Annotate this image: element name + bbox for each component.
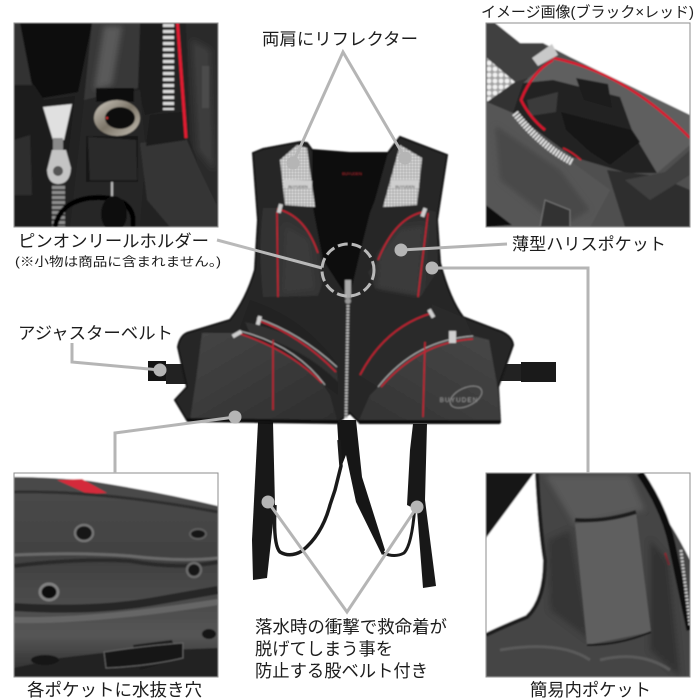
label: image note: イメージ画像(ブラック×レッド) xyxy=(481,3,694,21)
label: accessories note: (※小物は商品に含まれません。) xyxy=(15,255,221,269)
callout: shoulder reflectors lines xyxy=(286,52,412,170)
right shoulder reflector: BUYUDEN xyxy=(395,184,415,189)
label: pin-on reel holder: ピンオンリールホルダー xyxy=(18,232,209,251)
label: crotch belt description: 落水時の衝撃で救命着が xyxy=(255,617,447,637)
callout: drainage holes leader xyxy=(115,410,242,473)
photo panel: pin-on reel holder close-up xyxy=(14,23,218,232)
label: crotch belt description: 防止する股ベルト付き xyxy=(255,661,428,681)
callout: inner pocket leader xyxy=(426,262,588,473)
left shoulder reflector xyxy=(280,145,315,207)
lower right pockets xyxy=(359,304,500,420)
label: simple inner pocket: 簡易内ポケット xyxy=(530,680,651,700)
label: shoulder reflectors: 両肩にリフレクター xyxy=(262,30,418,49)
label: crotch belt description: 脱げてしまう事を xyxy=(255,639,393,659)
red piping and zip lines xyxy=(238,209,473,417)
vest xyxy=(175,137,513,422)
callout: hari pocket leader xyxy=(394,244,507,256)
crotch straps xyxy=(252,420,436,588)
label: adjuster belt: アジャスターベルト xyxy=(18,324,173,343)
label: crotch belt description xyxy=(255,617,447,681)
callout: reel holder leader and dashed circle xyxy=(217,240,374,296)
lower left pockets xyxy=(190,300,338,420)
photo panel: simple inner pocket close-up xyxy=(486,473,690,677)
neck label: BUYUDEN xyxy=(342,171,362,176)
callout: adjuster belt leader xyxy=(72,343,166,376)
label: drainage holes: 各ポケットに水抜き穴 xyxy=(27,680,202,700)
right shoulder reflector xyxy=(383,145,422,207)
vest body xyxy=(175,137,513,422)
vest logo xyxy=(440,382,485,412)
side adjuster belts xyxy=(148,361,556,384)
photo panel: thin hari pocket close-up xyxy=(486,23,690,227)
vest neck lining xyxy=(312,150,388,300)
label: thin hari pocket: 薄型ハリスポケット xyxy=(512,235,666,254)
vest hem shadow xyxy=(187,420,500,422)
photo panel: drainage holes close-up xyxy=(14,473,218,677)
callout: crotch belt lines xyxy=(262,496,424,612)
left shoulder reflector: BUYUDEN xyxy=(288,184,308,189)
zipper pulls xyxy=(232,204,456,343)
upper chest pockets xyxy=(260,208,438,297)
centre zipper xyxy=(345,280,351,418)
vest logo: BUYUDEN xyxy=(440,397,478,404)
